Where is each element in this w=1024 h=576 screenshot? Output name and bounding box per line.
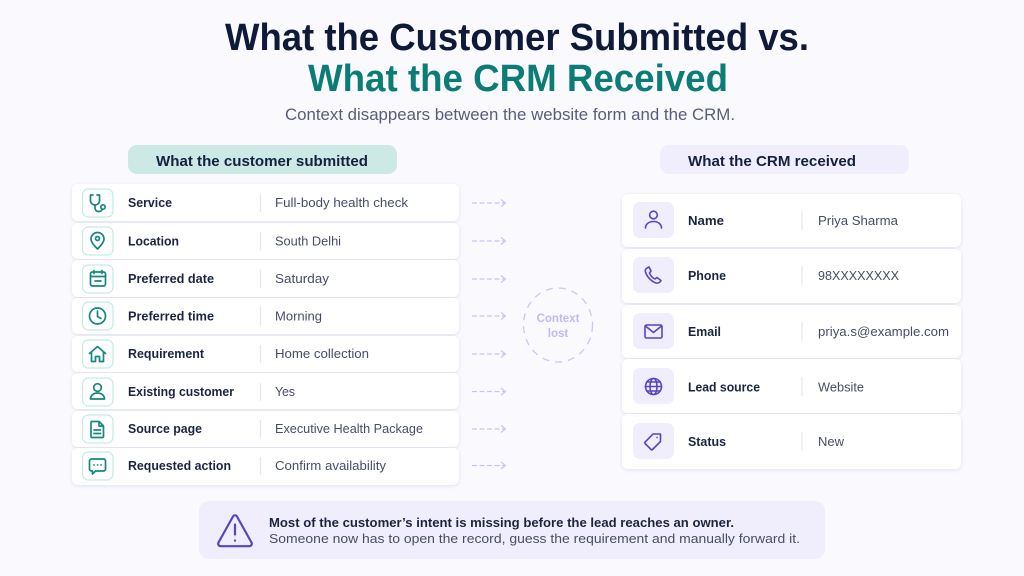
row: preferred date: Preferred date [128,272,214,286]
row: email: priya.s@example.com [818,325,949,339]
row: lead source [622,359,961,413]
row: email: Email [688,325,721,339]
title [225,17,809,100]
row: requirement [72,336,459,372]
callout: context lost: lost [548,328,568,340]
heading: customer submitted: What the customer submitted [156,153,368,170]
row: status [622,414,961,469]
heading: CRM received: What the CRM received [688,153,856,170]
row: preferred time: Morning [275,310,322,324]
row: lead source: Lead source [688,380,760,394]
callout: context lost: Context [537,313,580,325]
row: status: Status [688,435,726,449]
row: existing customer [72,373,459,409]
row: preferred date [72,260,459,297]
row: service: Full-body health check [275,196,409,210]
row: preferred time [72,298,459,334]
callout: intent missing: Most of the customer’s intent is missing before the lead reaches an owner. [269,515,734,530]
row: preferred date: Saturday [275,272,330,286]
row: location: Location [128,234,179,248]
row: requested action: Confirm availability [275,459,387,473]
row: source page [72,411,459,447]
arrows: form fields toward context lost [472,200,506,469]
row: phone: Phone [688,269,726,283]
row: location [72,223,459,259]
row: requirement: Home collection [275,347,369,361]
title: What the CRM Received [308,58,728,100]
row: requirement: Requirement [128,347,205,361]
row: location: South Delhi [275,234,341,248]
row: lead source: Website [818,380,864,394]
subtitle: Context disappears between the website form and the CRM. [285,106,735,124]
row: phone [622,249,961,303]
row: source page: Executive Health Package [275,422,423,436]
callout: intent missing [199,501,825,559]
row: phone: 98XXXXXXXX [818,269,900,283]
row: source page: Source page [128,422,202,436]
title: What the Customer Submitted vs. [225,17,809,59]
row: status: New [818,435,845,449]
row: service [72,184,459,221]
heading: CRM received [660,145,909,174]
row: name: Name [688,214,724,228]
panel: CRM received rows [622,194,961,469]
row: existing customer: Yes [275,385,295,399]
callout: context lost [524,288,592,362]
callout: intent missing: Someone now has to open the record, guess the requirement and manually forward it. [269,531,800,546]
row: service: Service [128,196,172,210]
row: name [622,194,961,247]
heading: customer submitted [128,145,397,174]
row: existing customer: Existing customer [128,385,234,399]
row: requested action [72,448,459,485]
row: requested action: Requested action [128,459,231,473]
panel: customer submitted rows [72,184,459,485]
row: name: Priya Sharma [818,214,898,228]
icon: warning triangle [218,515,252,546]
row: email [622,305,961,358]
row: preferred time: Preferred time [128,310,214,324]
